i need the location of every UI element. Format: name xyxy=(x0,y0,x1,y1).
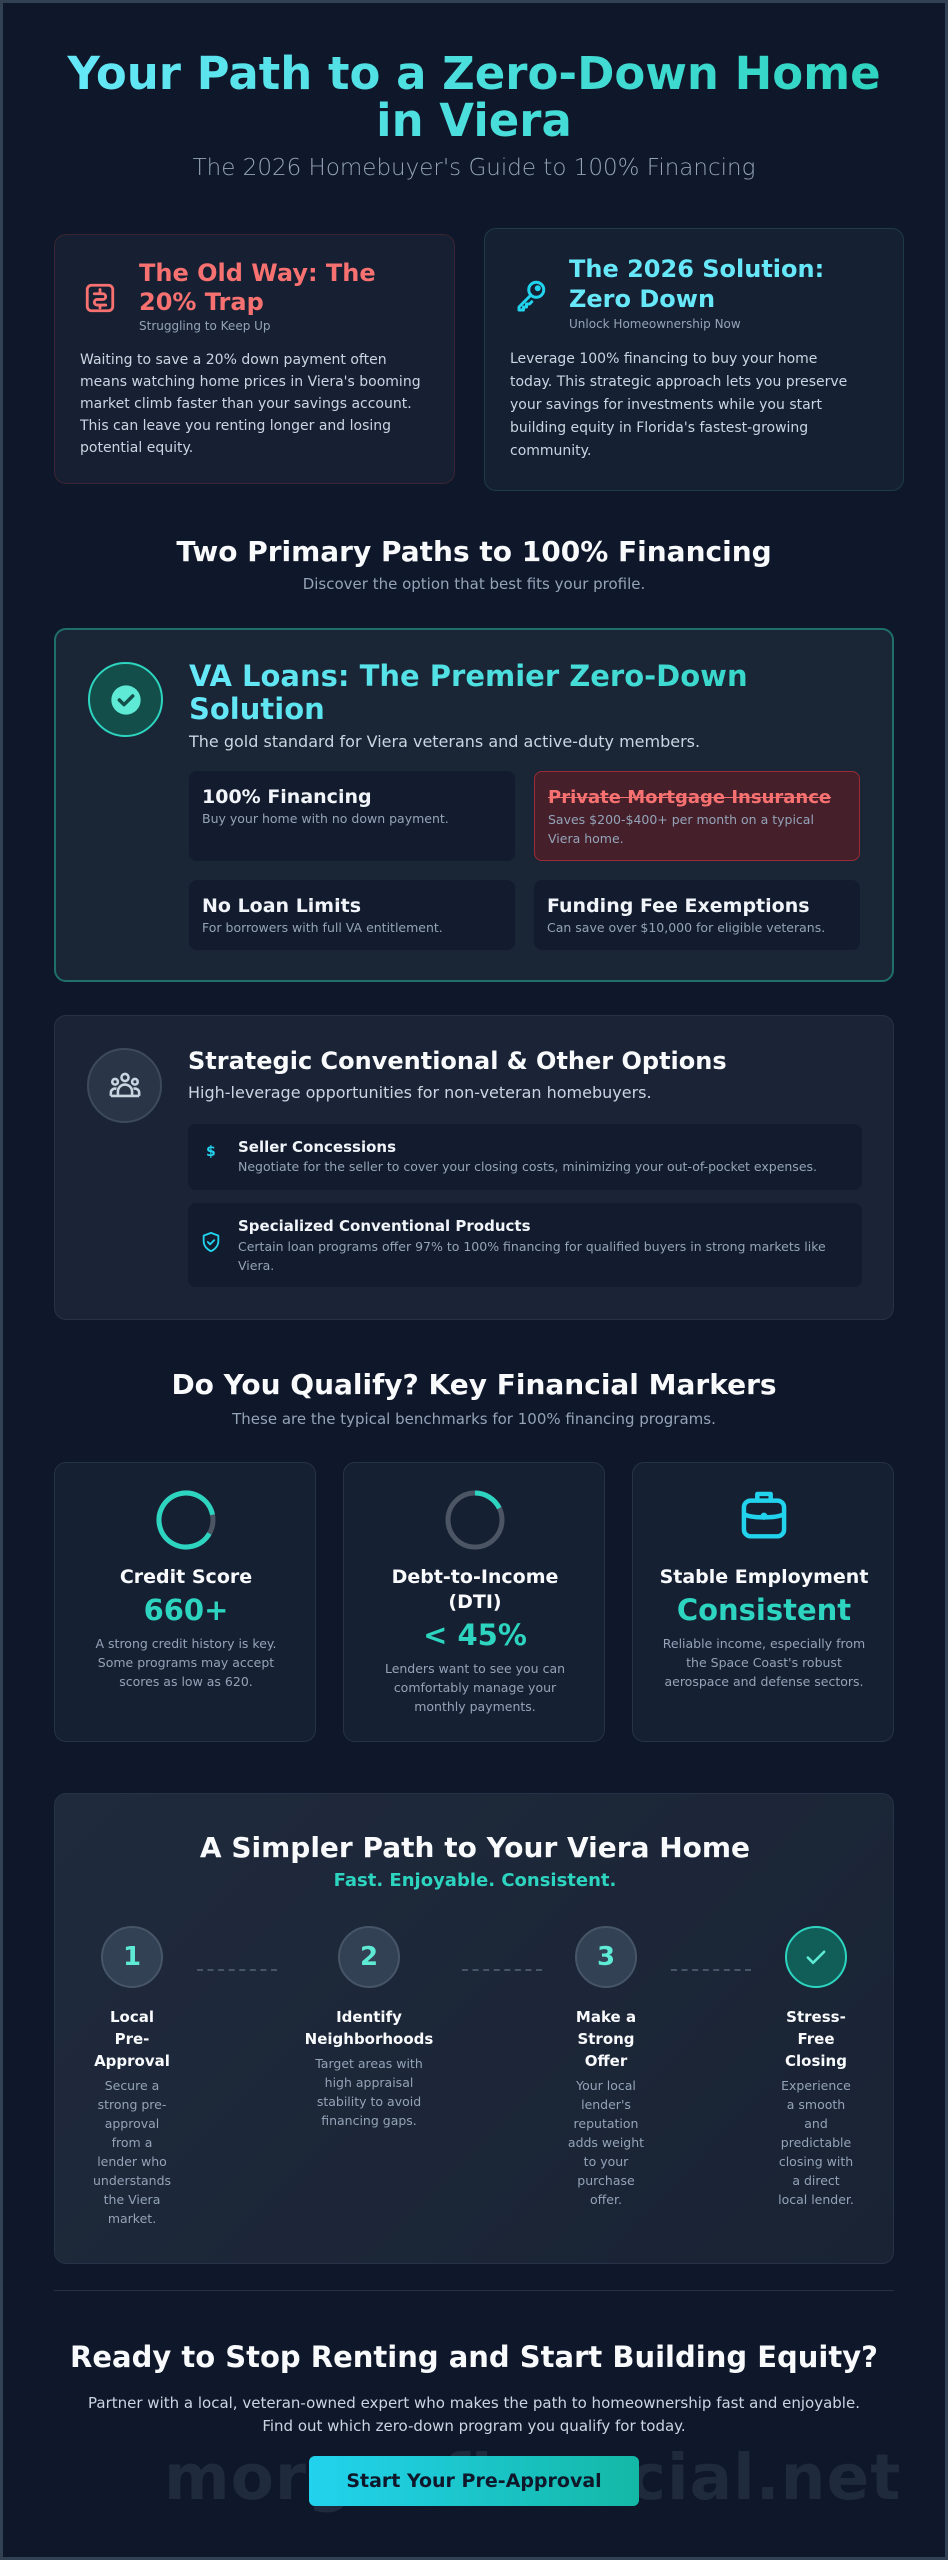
text: DTI: Debt-to-Income xyxy=(392,1566,558,1588)
subheading: fast: Fast. Enjoyable. Consistent. xyxy=(334,1870,616,1891)
icon: trap xyxy=(86,284,114,312)
step 1: from a xyxy=(112,2135,152,2150)
text: CTA paragraph: Find out which zero-down program you qualify for today. xyxy=(262,2417,686,2435)
subheading: Unlock Homeownership Now xyxy=(569,317,741,331)
feature: funding fee: Can save over $10,000 for eligible veterans. xyxy=(547,920,825,935)
panel: simpler path xyxy=(54,1793,894,2264)
icon: dollar: $ xyxy=(206,1144,216,1160)
text: VA sub: The gold standard for Viera veterans and active-duty members. xyxy=(189,732,700,751)
text: solution body: today. This strategic approach lets you preserve your savings for investments while you start building equity in Florida's fastest-growing community. xyxy=(510,374,847,459)
step 4: closing with xyxy=(779,2154,853,2169)
feature: PMI: Private Mortgage Insurance xyxy=(548,787,831,808)
item: specialized conventional: Certain loan programs offer 97% to 100% financing for qualified buyers in strong markets like Viera. xyxy=(238,1239,826,1273)
panel: DTI xyxy=(343,1462,605,1742)
heading: VA: Solution xyxy=(189,692,325,726)
chart: DTI ring xyxy=(446,1490,504,1550)
step 3: Make a xyxy=(576,2008,636,2026)
step 2: financing gaps. xyxy=(321,2113,417,2128)
button: CTA: Start Your Pre-Approval xyxy=(346,2470,602,2492)
step 3: Your local xyxy=(576,2078,636,2093)
step 1: Approval xyxy=(94,2052,170,2070)
step 2: high appraisal xyxy=(325,2075,413,2090)
item: specialized conventional: Specialized Conventional Products xyxy=(238,1217,531,1235)
feature: no loan limits: For borrowers with full VA entitlement. xyxy=(202,920,443,935)
title: in Viera xyxy=(376,94,572,147)
heading: qualify: Do You Qualify? Key Financial Markers xyxy=(171,1368,777,1401)
step 2: Target areas with xyxy=(315,2056,423,2071)
panel: VA loans xyxy=(54,628,894,982)
step 4: a direct xyxy=(792,2173,840,2188)
feature: 100% financing: 100% Financing xyxy=(202,786,372,808)
step 3: 3 xyxy=(597,1942,615,1972)
text: credit: scores as low as 620. xyxy=(119,1674,253,1689)
step 3: Offer xyxy=(585,2052,627,2070)
icon: briefcase xyxy=(742,1492,786,1538)
heading: solution xyxy=(569,255,824,313)
step 1: Pre- xyxy=(115,2030,149,2048)
heading: old way: The Old Way: The xyxy=(139,259,376,287)
text: CTA paragraph: Partner with a local, veteran-owned expert who makes the path to homeownership fast and enjoyable. xyxy=(88,2394,860,2412)
step 3: purchase xyxy=(577,2173,635,2188)
feature: PMI: Saves $200-$400+ per month on a typical Viera home. xyxy=(548,812,814,846)
heading: conventional: Strategic Conventional & Other Options xyxy=(188,1047,727,1075)
heading: CTA: Ready to Stop Renting and Start Building Equity? xyxy=(70,2340,878,2374)
panel: credit score xyxy=(54,1462,316,1742)
feature: PMI xyxy=(534,771,860,861)
step 4: predictable xyxy=(781,2135,851,2150)
step 1: approval xyxy=(105,2116,159,2131)
text: employment xyxy=(660,1566,868,1689)
heading: VA xyxy=(189,660,869,726)
text: DTI: (DTI) xyxy=(448,1591,502,1613)
feature: 100% financing: Buy your home with no down payment. xyxy=(202,811,449,826)
subheading: qualify: These are the typical benchmarks for 100% financing programs. xyxy=(232,1410,716,1428)
chart: credit ring xyxy=(156,1490,216,1550)
step 1: lender who xyxy=(97,2154,167,2169)
step 2 xyxy=(305,1926,433,2128)
text: credit xyxy=(96,1566,276,1689)
text: credit: Credit Score xyxy=(120,1566,252,1588)
text: credit: 660+ xyxy=(144,1593,228,1627)
title: Your Path to a Zero-Down Home xyxy=(67,47,881,100)
step 1 xyxy=(93,1926,171,2226)
heading: simpler path: A Simpler Path to Your Viera Home xyxy=(200,1831,750,1864)
item: specialized conventional xyxy=(188,1203,862,1287)
subheading: Struggling to Keep Up xyxy=(139,319,271,333)
step 3: Strong xyxy=(577,2030,635,2048)
step 1: Secure a xyxy=(105,2078,159,2093)
heading: old way: 20% Trap xyxy=(139,288,264,316)
text: conventional sub: High-leverage opportunities for non-veteran homebuyers. xyxy=(188,1083,652,1102)
arrow: connector 1 xyxy=(197,1969,277,1971)
step 4: and xyxy=(804,2116,828,2131)
text: credit: Some programs may accept xyxy=(98,1655,274,1670)
item: seller concessions xyxy=(188,1124,862,1190)
item: seller concessions: Seller Concessions xyxy=(238,1138,396,1156)
step 4: local lender. xyxy=(778,2192,854,2207)
subheading: two paths: Discover the option that best fits your profile. xyxy=(303,575,645,593)
step 2: 2 xyxy=(360,1942,378,1972)
watermark: morganfinancial.net xyxy=(164,2441,901,2514)
text: DTI: Lenders want to see you can xyxy=(385,1661,565,1676)
text: DTI: monthly payments. xyxy=(414,1699,536,1714)
step 2: Neighborhoods xyxy=(305,2030,433,2048)
icon: group xyxy=(87,1048,162,1123)
panel: old way xyxy=(54,234,455,484)
button: CTA xyxy=(309,2456,639,2506)
step 4: Experience xyxy=(781,2078,851,2093)
text: DTI: < 45% xyxy=(423,1618,527,1652)
text: employment: Stable Employment xyxy=(660,1566,868,1588)
panel: solution xyxy=(484,228,904,491)
text: DTI xyxy=(385,1566,565,1714)
step 1: understands xyxy=(93,2173,171,2188)
text: credit: A strong credit history is key. xyxy=(96,1636,276,1651)
step 3 xyxy=(568,1926,644,2207)
text: employment: Reliable income, especially from xyxy=(663,1636,865,1651)
arrow: connector 2 xyxy=(462,1969,542,1971)
subtitle: The 2026 Homebuyer's Guide to 100% Financing xyxy=(193,155,755,181)
step 3: lender's xyxy=(581,2097,631,2112)
step 1: Local xyxy=(110,2008,154,2026)
heading: VA: VA Loans: The Premier Zero-Down xyxy=(189,659,748,693)
icon: VA check xyxy=(88,662,163,737)
step 4: Stress- xyxy=(786,2008,846,2026)
step 1: strong pre- xyxy=(98,2097,166,2112)
step 2: stability to avoid xyxy=(317,2094,421,2109)
step 4: Free xyxy=(797,2030,835,2048)
title xyxy=(40,50,908,144)
feature: funding fee xyxy=(534,880,860,950)
step 1: market. xyxy=(108,2211,156,2226)
item: seller concessions: Negotiate for the seller to cover your closing costs, minimizing your out-of-pocket expenses. xyxy=(238,1159,817,1174)
feature: no loan limits xyxy=(189,880,515,950)
panel: employment xyxy=(632,1462,894,1742)
step 1: 1 xyxy=(123,1942,141,1972)
text: old way body: Waiting to save a 20% down payment often means watching home prices in Viera's booming market climb faster than your savings account. This can leave you renting longer and losing potential equity. xyxy=(80,352,421,456)
text: employment: the Space Coast's robust xyxy=(686,1655,842,1670)
text: solution body: Leverage 100% financing to buy your home xyxy=(510,351,817,367)
step 3: reputation xyxy=(574,2116,638,2131)
step 4: a smooth xyxy=(787,2097,845,2112)
heading: two paths: Two Primary Paths to 100% Financing xyxy=(176,535,772,568)
heading: old way xyxy=(139,259,376,316)
text: employment: Consistent xyxy=(677,1593,851,1627)
text: DTI: comfortably manage your xyxy=(394,1680,556,1695)
heading: solution: The 2026 Solution: xyxy=(569,255,824,283)
step 3: adds weight xyxy=(568,2135,644,2150)
step 4: Closing xyxy=(785,2052,847,2070)
panel: conventional xyxy=(54,1015,894,1320)
step 4 xyxy=(778,1926,854,2207)
icon: shield xyxy=(202,1232,220,1252)
feature: 100% financing xyxy=(189,771,515,861)
step 2: Identify xyxy=(336,2008,402,2026)
text: CTA paragraph xyxy=(88,2394,860,2435)
step 3: to your xyxy=(584,2154,628,2169)
feature: funding fee: Funding Fee Exemptions xyxy=(547,895,810,917)
step 3: offer. xyxy=(590,2192,622,2207)
text: employment: aerospace and defense sectors. xyxy=(664,1674,864,1689)
icon: key xyxy=(518,280,546,312)
step 1: the Viera xyxy=(104,2192,160,2207)
feature: no loan limits: No Loan Limits xyxy=(202,895,361,917)
arrow: connector 3 xyxy=(671,1969,751,1971)
heading: solution: Zero Down xyxy=(569,285,715,313)
